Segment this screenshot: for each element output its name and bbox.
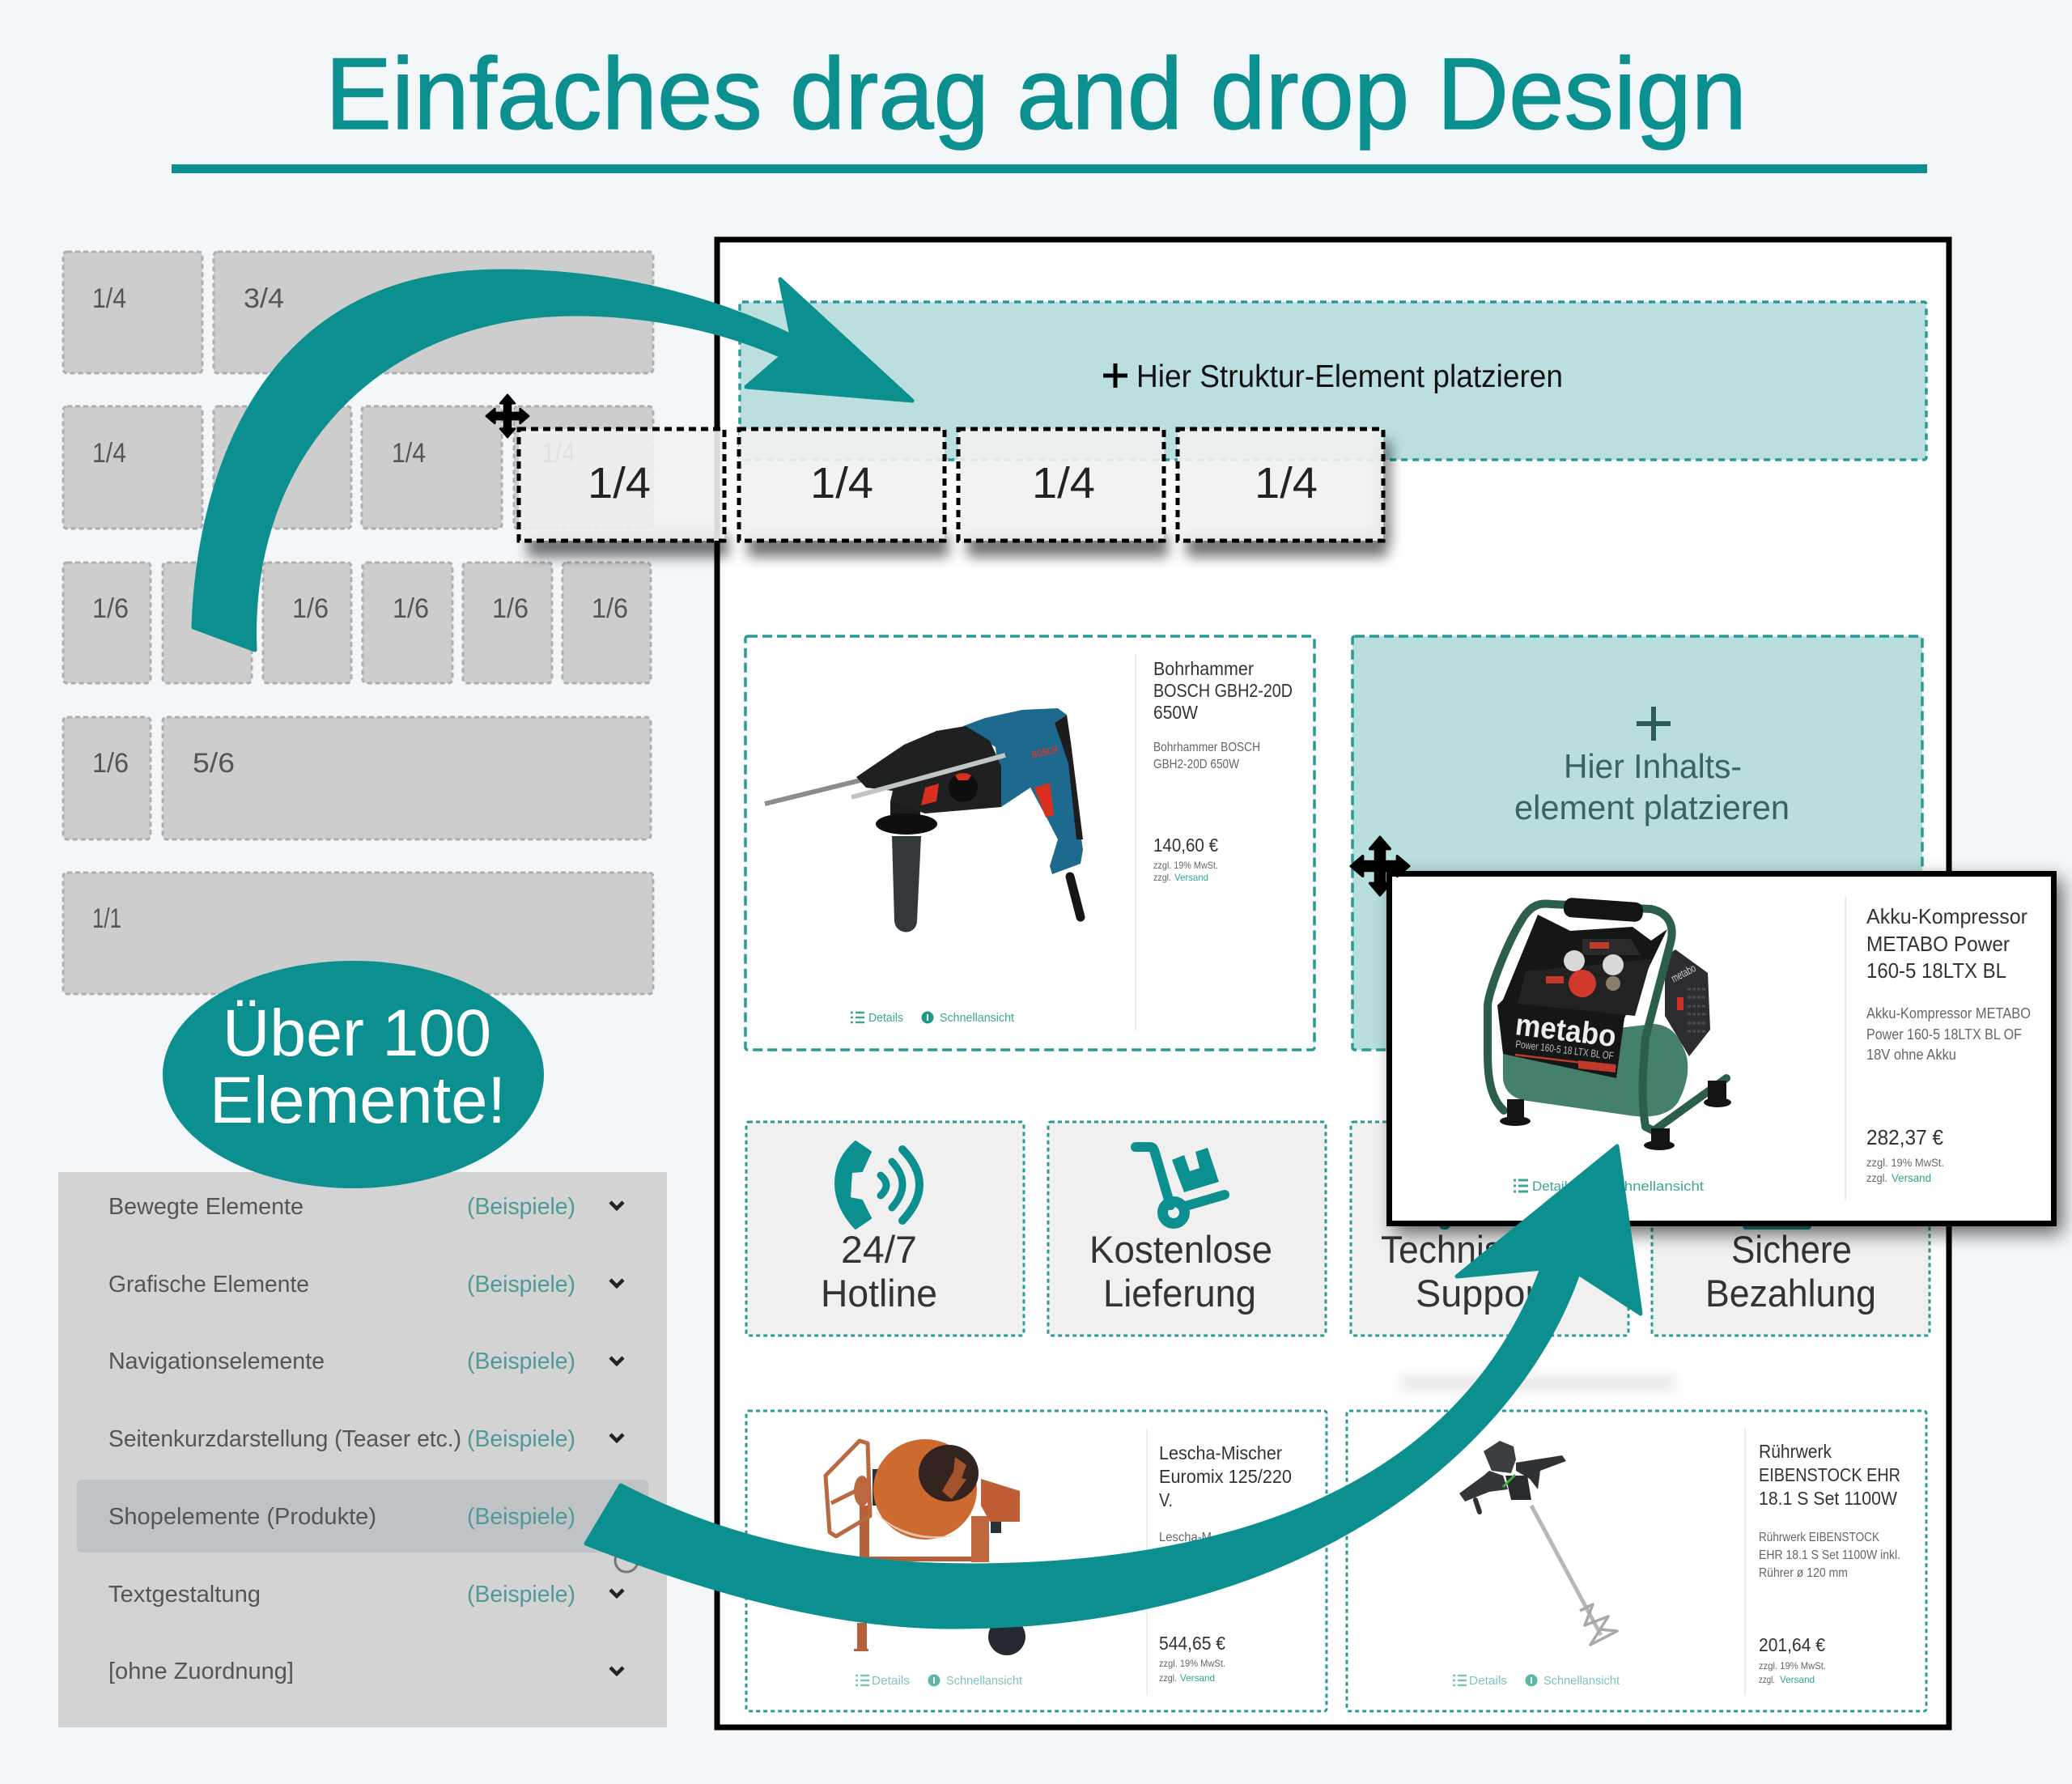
product card: Lescha-Mischer: Lescha-M bbox=[1159, 1531, 1212, 1544]
icon: compressor: metabo bbox=[1514, 1008, 1618, 1054]
arrow: grid to dropzone bbox=[193, 271, 912, 650]
panel: element category list: (Beispiele) bbox=[467, 1272, 575, 1298]
dropzone: structure element bbox=[740, 302, 1926, 460]
feature box: Technischer Support bbox=[1351, 1122, 1628, 1336]
panel: layout column grid: 1/4 bbox=[392, 438, 426, 469]
dragged product popup: Akku-Kompressor: 160-5 18LTX BL bbox=[1866, 958, 2006, 983]
feature box: Lieferung bbox=[1048, 1122, 1326, 1336]
product card: Bohrhammer: zzgl. 19% MwSt. bbox=[1153, 860, 1218, 871]
panel: element category list: (Beispiele) bbox=[467, 1194, 575, 1220]
feature box: Hotline: Hotline bbox=[821, 1272, 937, 1315]
dragged structure element: four 1/4 columns: 1/4 bbox=[1255, 459, 1318, 508]
title: Einfaches drag and drop Design bbox=[325, 38, 1747, 151]
product card: Bohrhammer: 140,60 € bbox=[1153, 835, 1218, 856]
panel: element category list: Bewegte Elemente bbox=[108, 1194, 304, 1220]
icon: delivery trolley bbox=[1136, 1147, 1225, 1224]
product card: Rührwerk: Schnellansicht bbox=[1543, 1674, 1620, 1688]
panel: element category list: [ohne Zuordnung] bbox=[108, 1659, 294, 1684]
product card: Lescha-Mischer: Schnellansicht bbox=[946, 1674, 1023, 1688]
panel: page canvas bbox=[717, 240, 1949, 1727]
dragged product popup: Akku-Kompressor: Akku-Kompressor bbox=[1866, 904, 2027, 928]
product card: Rührwerk: Versand bbox=[1780, 1674, 1815, 1685]
dragged product popup: Akku-Kompressor: 18V ohne Akku bbox=[1866, 1047, 1956, 1063]
callout: Über 100 Elemente: Über 100 bbox=[223, 996, 491, 1070]
dragged product popup: Akku-Kompressor: METABO Power bbox=[1866, 932, 2010, 956]
product card: Bohrhammer: BOSCH GBH2-20D bbox=[1153, 680, 1293, 701]
icon: phone bbox=[835, 1141, 919, 1229]
product card: Rührwerk: 201,64 € bbox=[1759, 1634, 1825, 1655]
product card: Lescha-Mischer: Versand bbox=[1180, 1672, 1215, 1684]
callout: Über 100 Elemente: Elemente! bbox=[210, 1064, 506, 1137]
panel: layout column grid: 1/6 bbox=[92, 748, 129, 779]
panel: element category list: Shopelemente (Produkte) bbox=[108, 1504, 376, 1530]
product card: Rührwerk: Rührwerk bbox=[1759, 1441, 1832, 1462]
icon: drill bbox=[765, 708, 1083, 932]
dragged product popup: Akku-Kompressor: Akku-Kompressor METABO bbox=[1866, 1005, 2031, 1022]
dragged product popup: Akku-Kompressor: Schnellansicht bbox=[1607, 1179, 1704, 1194]
product card: Lescha-Mischer: 544,65 € bbox=[1159, 1633, 1225, 1654]
panel: layout column grid: 1/4 bbox=[92, 283, 126, 314]
panel: element category list bbox=[58, 1172, 667, 1727]
icon: compressor: metabo bbox=[1669, 961, 1698, 985]
feature box: Technischer Support: Technischer bbox=[1381, 1228, 1572, 1271]
dragged structure element: four 1/4 columns: 1/4 bbox=[1032, 459, 1095, 508]
highlighted row bbox=[77, 1480, 648, 1553]
panel: layout column grid: 1/6 bbox=[92, 593, 129, 624]
title bbox=[172, 38, 1927, 173]
panel: layout column grid bbox=[63, 252, 653, 994]
panel: layout column grid: 5/6 bbox=[193, 748, 235, 779]
product card: Bohrhammer: 650W bbox=[1153, 702, 1198, 723]
product card: Bohrhammer bbox=[745, 636, 1314, 1050]
icon: stirrer bbox=[1459, 1441, 1617, 1645]
arrow: list to product popup bbox=[586, 1146, 1641, 1627]
panel: element category list: (Beispiele) bbox=[467, 1504, 575, 1530]
product card: Rührwerk: EHR 18.1 S Set 1100W inkl. bbox=[1759, 1548, 1900, 1562]
icon: compressor: Power 160-5 18 LTX BL OF bbox=[1515, 1038, 1615, 1062]
panel: layout column grid: 1/4 bbox=[241, 438, 275, 469]
panel: layout column grid: 1/6 bbox=[193, 593, 229, 624]
dragged product popup: Akku-Kompressor bbox=[1389, 874, 2062, 1234]
panel: element category list: Navigationselemente bbox=[108, 1349, 325, 1374]
panel: element category list: (Beispiele) bbox=[467, 1426, 575, 1452]
product card: Lescha-Mischer: Details bbox=[872, 1674, 910, 1688]
panel: layout column grid: 1/4 bbox=[541, 438, 575, 469]
product card: Bohrhammer: Schnellansicht bbox=[940, 1011, 1015, 1025]
feature box: Sichere Bezahlung: Sichere bbox=[1731, 1228, 1852, 1271]
product card: Lescha-Mischer bbox=[746, 1411, 1327, 1711]
feature box: Technischer Support: Support bbox=[1416, 1272, 1548, 1315]
product card: Rührwerk: zzgl. 19% MwSt. bbox=[1759, 1660, 1826, 1671]
product card: Rührwerk: zzgl. bbox=[1759, 1674, 1775, 1685]
panel: layout column grid: 3/4 bbox=[244, 283, 284, 314]
dragged product popup: Akku-Kompressor: zzgl. bbox=[1866, 1171, 1887, 1184]
product card: Lescha-Mischer: zzgl. 19% MwSt. bbox=[1159, 1658, 1225, 1669]
product card: Rührwerk: 18.1 S Set 1100W bbox=[1759, 1488, 1897, 1509]
panel: layout column grid: 1/6 bbox=[592, 593, 628, 624]
feature box: Lieferung: Kostenlose bbox=[1089, 1228, 1272, 1271]
panel: layout column grid: 1/6 bbox=[393, 593, 429, 624]
product card: Rührwerk bbox=[1347, 1411, 1926, 1711]
feature box: Sichere Bezahlung bbox=[1652, 1122, 1930, 1336]
icon: move cursor lower bbox=[1351, 837, 1409, 895]
product card: Bohrhammer: Details bbox=[868, 1011, 903, 1025]
product card: Bohrhammer: Bohrhammer bbox=[1153, 658, 1254, 679]
icon: cement mixer bbox=[826, 1439, 1025, 1655]
panel: layout column grid: 1/6 bbox=[492, 593, 529, 624]
icon: compressor bbox=[1488, 898, 1731, 1150]
feature box: Hotline bbox=[746, 1122, 1024, 1336]
product card: Rührwerk: EIBENSTOCK EHR bbox=[1759, 1464, 1900, 1485]
dragged product popup: Akku-Kompressor: Details bbox=[1532, 1179, 1574, 1194]
panel: element category list: Seitenkurzdarstellung (Teaser etc.) bbox=[108, 1426, 461, 1452]
dragged product popup: Akku-Kompressor: 282,37 € bbox=[1866, 1125, 1943, 1149]
product card: Bohrhammer: zzgl. bbox=[1153, 872, 1171, 883]
product card: Lescha-Mischer: V. bbox=[1159, 1489, 1173, 1510]
panel: layout column grid: 1/4 bbox=[92, 438, 126, 469]
product card: Bohrhammer: Bohrhammer BOSCH bbox=[1153, 741, 1260, 754]
product card: Bohrhammer: GBH2-20D 650W bbox=[1153, 758, 1240, 771]
product card: Lescha-Mischer: zzgl. bbox=[1159, 1672, 1177, 1684]
panel: layout column grid: 1/6 bbox=[292, 593, 329, 624]
icon: move cursor upper bbox=[486, 395, 529, 437]
product card: Rührwerk: Rührer ø 120 mm bbox=[1759, 1566, 1848, 1580]
dragged product popup: Akku-Kompressor: Versand bbox=[1892, 1171, 1931, 1184]
product card: Rührwerk: Rührwerk EIBENSTOCK bbox=[1759, 1531, 1879, 1544]
dragged product popup: Akku-Kompressor: Power 160-5 18LTX BL OF bbox=[1866, 1026, 2022, 1043]
panel: element category list: Textgestaltung bbox=[108, 1582, 261, 1608]
dragged structure element: four 1/4 columns: 1/4 bbox=[588, 459, 651, 508]
feature box: Lieferung: Lieferung bbox=[1103, 1272, 1256, 1315]
dragged structure element: four 1/4 columns: 1/4 bbox=[810, 459, 873, 508]
dragged product popup: Akku-Kompressor: zzgl. 19% MwSt. bbox=[1866, 1156, 1944, 1169]
dropzone: content element: Hier Inhalts- bbox=[1564, 747, 1742, 785]
dropzone: content element: element platzieren bbox=[1514, 788, 1790, 826]
panel: layout column grid: 1/1 bbox=[92, 903, 121, 934]
dropzone: structure element: Hier Struktur-Element platzieren bbox=[1136, 359, 1563, 394]
product card: Lescha-Mischer: Lescha-Mischer bbox=[1159, 1442, 1282, 1463]
panel: element category list: (Beispiele) bbox=[467, 1349, 575, 1374]
product card: Lescha-Mischer: Euromix 125/220 bbox=[1159, 1466, 1292, 1487]
faint shadow above product row bbox=[1400, 1376, 1675, 1391]
panel: element category list: (Beispiele) bbox=[467, 1582, 575, 1608]
panel: element category list: Grafische Elemente bbox=[108, 1272, 309, 1298]
icon: drill: BOSCH bbox=[1030, 743, 1059, 761]
product card: Bohrhammer: Versand bbox=[1174, 872, 1208, 883]
dropzone: content element bbox=[1352, 636, 1922, 1050]
feature box: Sichere Bezahlung: Bezahlung bbox=[1705, 1272, 1876, 1315]
product card: Rührwerk: Details bbox=[1469, 1674, 1507, 1688]
dragged structure element: four 1/4 columns bbox=[519, 429, 1391, 557]
callout: Über 100 Elemente bbox=[163, 961, 544, 1188]
feature box: Hotline: 24/7 bbox=[841, 1228, 917, 1271]
